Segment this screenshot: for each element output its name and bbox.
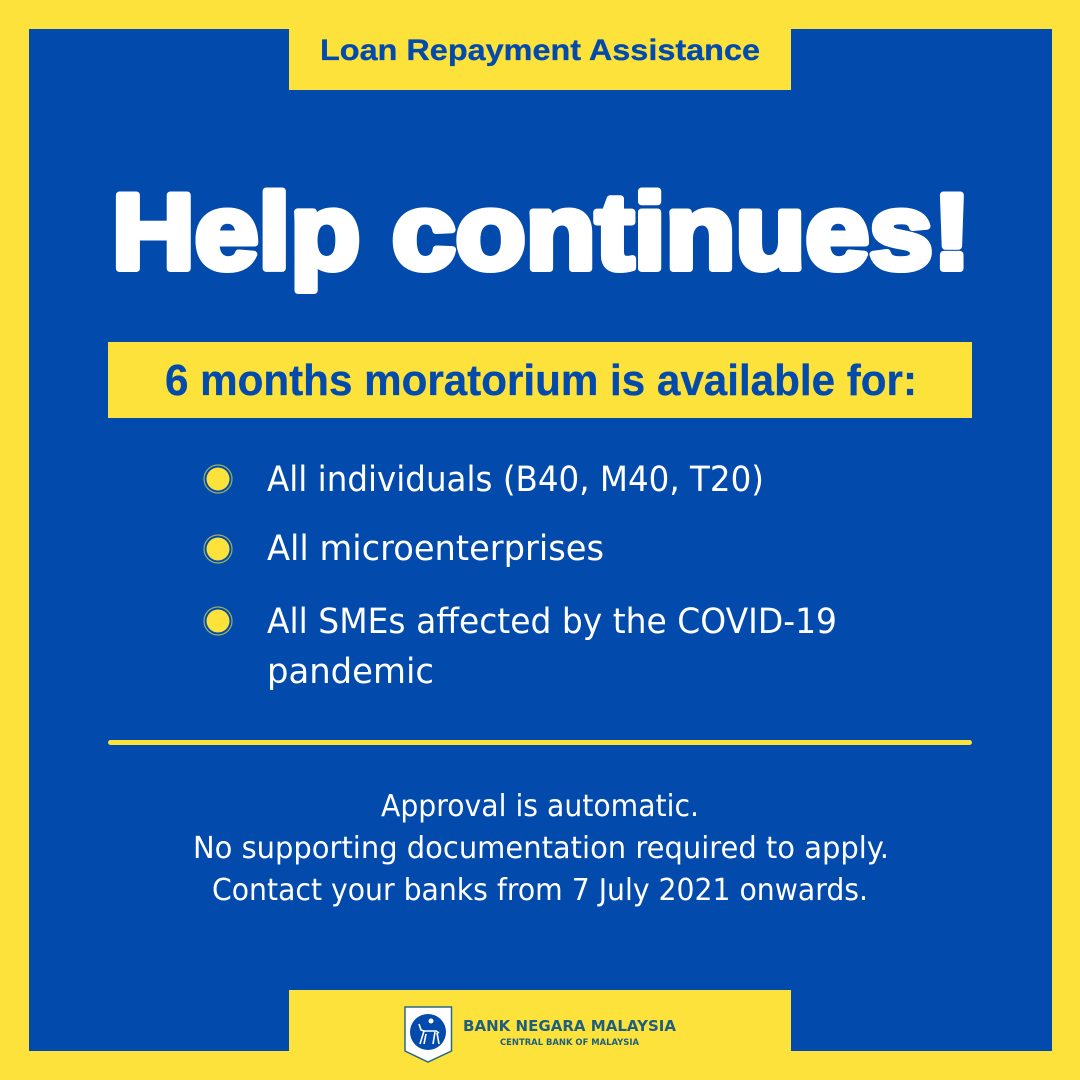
closing note: No supporting documentation required to apply.: [193, 831, 889, 866]
bullet item: SMEs: pandemic: [267, 652, 434, 692]
bullet item: microenterprises: All microenterprises: [267, 529, 604, 569]
logo wordmark: CENTRAL BANK OF MALAYSIA: [500, 1038, 639, 1048]
closing note: [193, 789, 889, 908]
closing note: Approval is automatic.: [381, 789, 699, 824]
top tab with heading: Loan Repayment Assistance: [320, 34, 760, 67]
closing note: Contact your banks from 7 July 2021 onwards.: [212, 873, 868, 908]
title: Help continues!: [112, 172, 971, 292]
subheading banner: [108, 342, 972, 418]
icon: bank crest: [405, 1007, 452, 1062]
divider line: [108, 740, 972, 745]
logo wordmark: [463, 1017, 676, 1048]
top tab with heading: [289, 29, 791, 90]
bullet list: [204, 460, 837, 692]
bullet item: individuals: All individuals (B40, M40, T20): [267, 460, 764, 500]
bullet item: SMEs: All SMEs affected by the COVID-19: [267, 602, 837, 642]
logo wordmark: BANK NEGARA MALAYSIA: [463, 1017, 676, 1035]
bullet item: SMEs: [204, 602, 837, 692]
bottom tab with logo: [289, 990, 791, 1062]
subheading banner: 6 months moratorium is available for:: [165, 356, 917, 405]
